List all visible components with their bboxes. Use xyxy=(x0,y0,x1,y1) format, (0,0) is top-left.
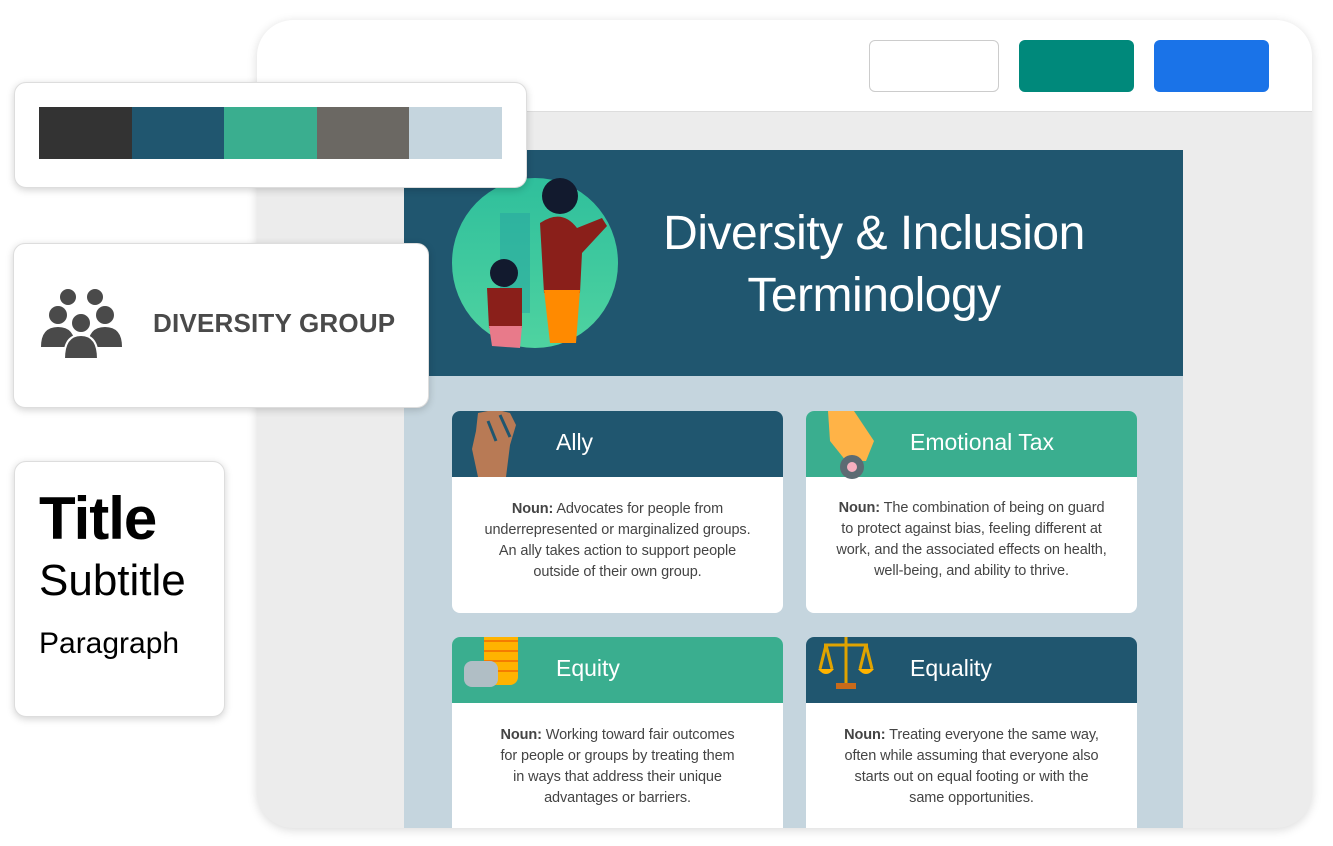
card: Emotional Tax: to protect against bias, feeling different at xyxy=(841,521,1102,537)
title: Diversity & Inclusion xyxy=(663,207,1085,260)
card: Emotional Tax: well-being, and ability to thrive. xyxy=(874,563,1069,579)
title sample: Title xyxy=(39,485,156,552)
button: blue xyxy=(1154,40,1269,92)
card: Equity: Noun: Working toward fair outcomes xyxy=(500,727,735,743)
card: Equality: starts out on equal footing or with the xyxy=(855,769,1088,785)
card: Equality: often while assuming that everyone also xyxy=(844,748,1099,764)
button: white xyxy=(869,40,999,92)
paragraph sample: Paragraph xyxy=(39,627,179,660)
colour swatches xyxy=(39,107,502,159)
card: Equity: for people or groups by treating them xyxy=(500,748,735,764)
card: Ally: Noun: Advocates for people from xyxy=(512,501,723,517)
card: Equity: Equity xyxy=(556,655,620,681)
card: Equity xyxy=(452,637,783,846)
icon: hand with coin xyxy=(828,411,874,479)
card: Emotional Tax: Noun: The combination of being on guard xyxy=(839,500,1104,516)
infographic xyxy=(404,150,1183,846)
diversity group card xyxy=(13,243,429,408)
card: Equality: same opportunities. xyxy=(909,790,1034,806)
icon: coins xyxy=(464,637,518,687)
button: teal xyxy=(1019,40,1134,92)
subtitle sample: Subtitle xyxy=(39,556,186,605)
illustration circle xyxy=(452,178,618,348)
icon: group xyxy=(41,289,122,358)
card: Emotional Tax: work, and the associated effects on health, xyxy=(836,542,1107,558)
typography card xyxy=(14,461,225,717)
card: Ally: An ally takes action to support people xyxy=(499,543,736,559)
icon: scales xyxy=(818,637,874,689)
browser window xyxy=(257,20,1312,828)
card: Ally: Ally xyxy=(556,429,593,455)
card: Equity: advantages or barriers. xyxy=(544,790,691,806)
label: DIVERSITY GROUP xyxy=(153,308,395,338)
card: Ally: underrepresented or marginalized groups. xyxy=(484,522,751,538)
card: Equality: Noun: Treating everyone the same way, xyxy=(844,727,1099,743)
title: Terminology xyxy=(747,269,1001,322)
card: Ally: outside of their own group. xyxy=(533,564,702,580)
browser toolbar xyxy=(257,20,1312,112)
card: Equality: Equality xyxy=(910,655,992,681)
title xyxy=(663,207,1085,322)
card: Emotional Tax: Emotional Tax xyxy=(910,429,1054,455)
card: Equity: in ways that address their unique xyxy=(513,769,722,785)
header banner xyxy=(404,150,1183,376)
card: Ally xyxy=(452,411,783,613)
card: Emotional Tax xyxy=(806,411,1137,613)
palette card xyxy=(14,82,527,188)
card: Equality xyxy=(806,637,1137,846)
icon: fist xyxy=(472,411,516,477)
